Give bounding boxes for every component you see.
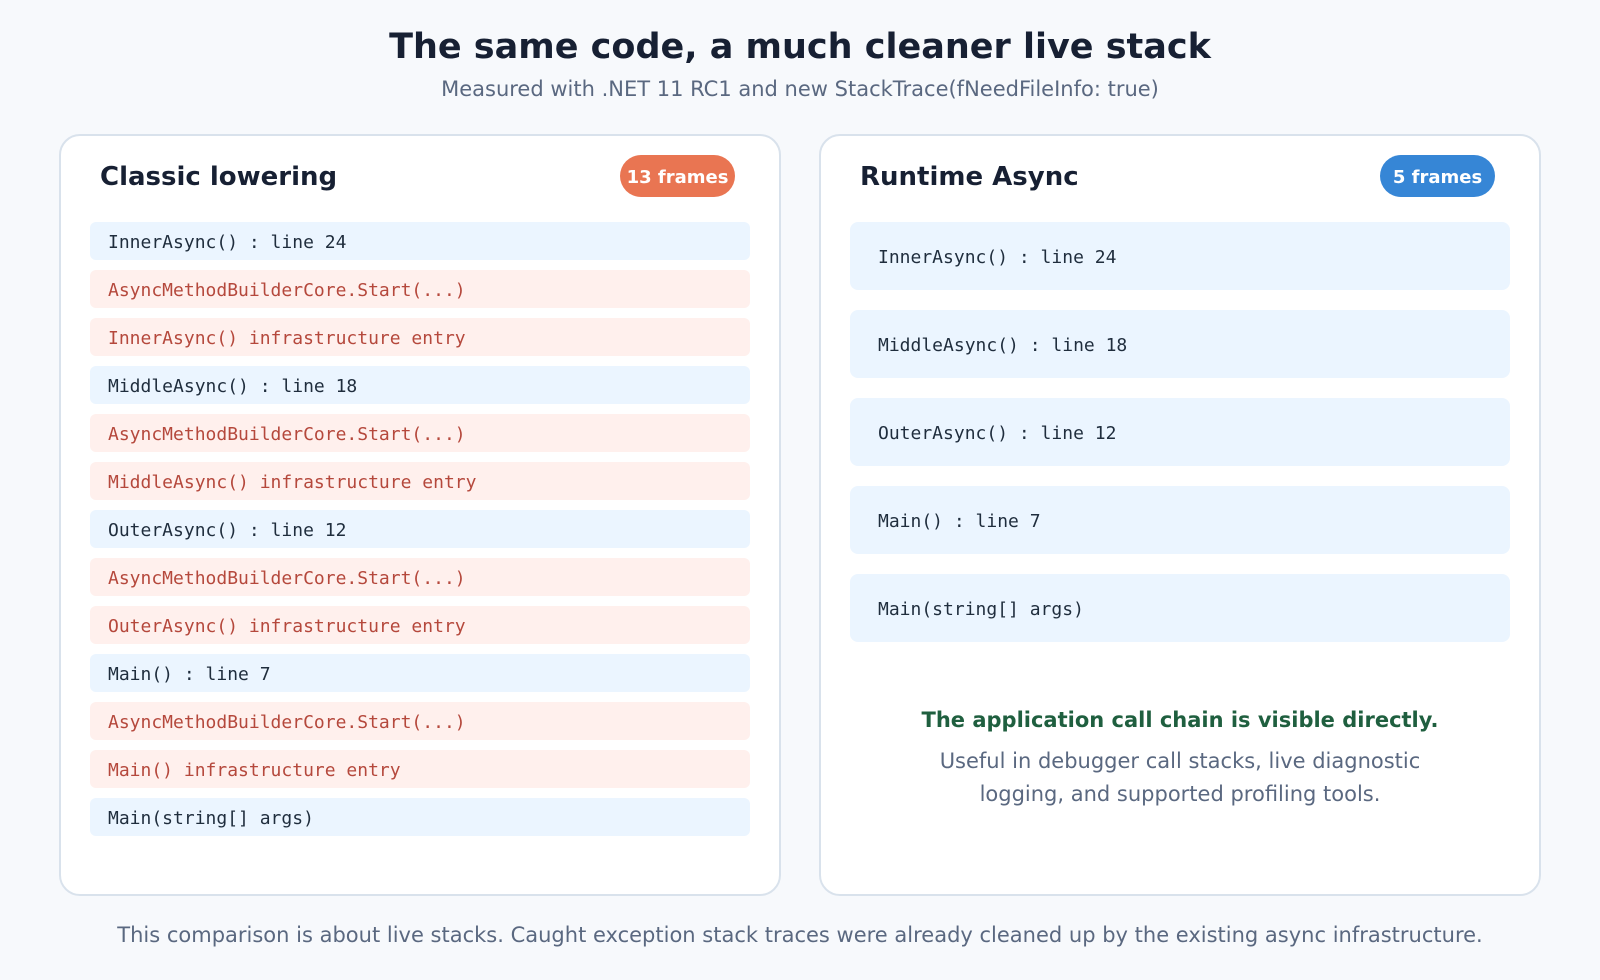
frame row 12: Main() infrastructure entry	[108, 760, 401, 781]
frame row 1: InnerAsync() : line 24	[108, 232, 346, 253]
frame row 3: OuterAsync() : line 12	[878, 423, 1116, 444]
frame row 6: MiddleAsync() infrastructure entry	[108, 472, 477, 493]
panel heading: classic lowering: Classic lowering	[100, 162, 337, 192]
frame row 9: OuterAsync() infrastructure entry	[108, 616, 466, 637]
frame row 11	[90, 702, 750, 740]
footnote: This comparison is about live stacks. Caught exception stack traces were already cleaned up by the existing async infrastructure.	[116, 923, 1483, 947]
frame row 8	[90, 558, 750, 596]
badge: 5 frames	[1380, 155, 1495, 197]
badge: 5 frames: 5 frames	[1393, 167, 1482, 188]
frame row 1	[90, 222, 750, 260]
callout body: Useful in debugger call stacks, live diagnostic	[940, 749, 1420, 773]
frame row 5: AsyncMethodBuilderCore.Start(...)	[108, 424, 466, 445]
frame row 6	[90, 462, 750, 500]
title: The same code, a much cleaner live stack	[389, 27, 1212, 67]
subtitle: Measured with .NET 11 RC1 and new StackTrace(fNeedFileInfo: true)	[441, 77, 1159, 101]
panel heading: runtime async: Runtime Async	[860, 162, 1079, 192]
frame row 13: Main(string[] args)	[108, 808, 314, 829]
frame row 12	[90, 750, 750, 788]
frame row 4: Main() : line 7	[878, 511, 1041, 532]
frame row 2: MiddleAsync() : line 18	[878, 335, 1127, 356]
frame row 13	[90, 798, 750, 836]
frame row 3: InnerAsync() infrastructure entry	[108, 328, 466, 349]
frame row 10: Main() : line 7	[108, 664, 271, 685]
frame row 1	[850, 222, 1510, 290]
frame row 8: AsyncMethodBuilderCore.Start(...)	[108, 568, 466, 589]
badge: 13 frames: 13 frames	[627, 167, 728, 188]
frame row 5: Main(string[] args)	[878, 599, 1084, 620]
frame row 4	[90, 366, 750, 404]
frame row 2	[850, 310, 1510, 378]
frame row 10	[90, 654, 750, 692]
frame row 3	[90, 318, 750, 356]
frame row 5	[850, 574, 1510, 642]
frame row 3	[850, 398, 1510, 466]
frame row 11: AsyncMethodBuilderCore.Start(...)	[108, 712, 466, 733]
badge: 13 frames	[620, 155, 735, 197]
frame row 7: OuterAsync() : line 12	[108, 520, 346, 541]
panel: runtime async	[820, 135, 1540, 895]
callout body: logging, and supported profiling tools.	[980, 782, 1380, 806]
callout headline: The application call chain is visible directly.	[922, 708, 1438, 732]
frame row 9	[90, 606, 750, 644]
frame row 4	[850, 486, 1510, 554]
frame row 4: MiddleAsync() : line 18	[108, 376, 357, 397]
frame row 1: InnerAsync() : line 24	[878, 247, 1116, 268]
frame row 2: AsyncMethodBuilderCore.Start(...)	[108, 280, 466, 301]
panel: classic lowering	[60, 135, 780, 895]
frame row 7	[90, 510, 750, 548]
frame row 5	[90, 414, 750, 452]
frame row 2	[90, 270, 750, 308]
